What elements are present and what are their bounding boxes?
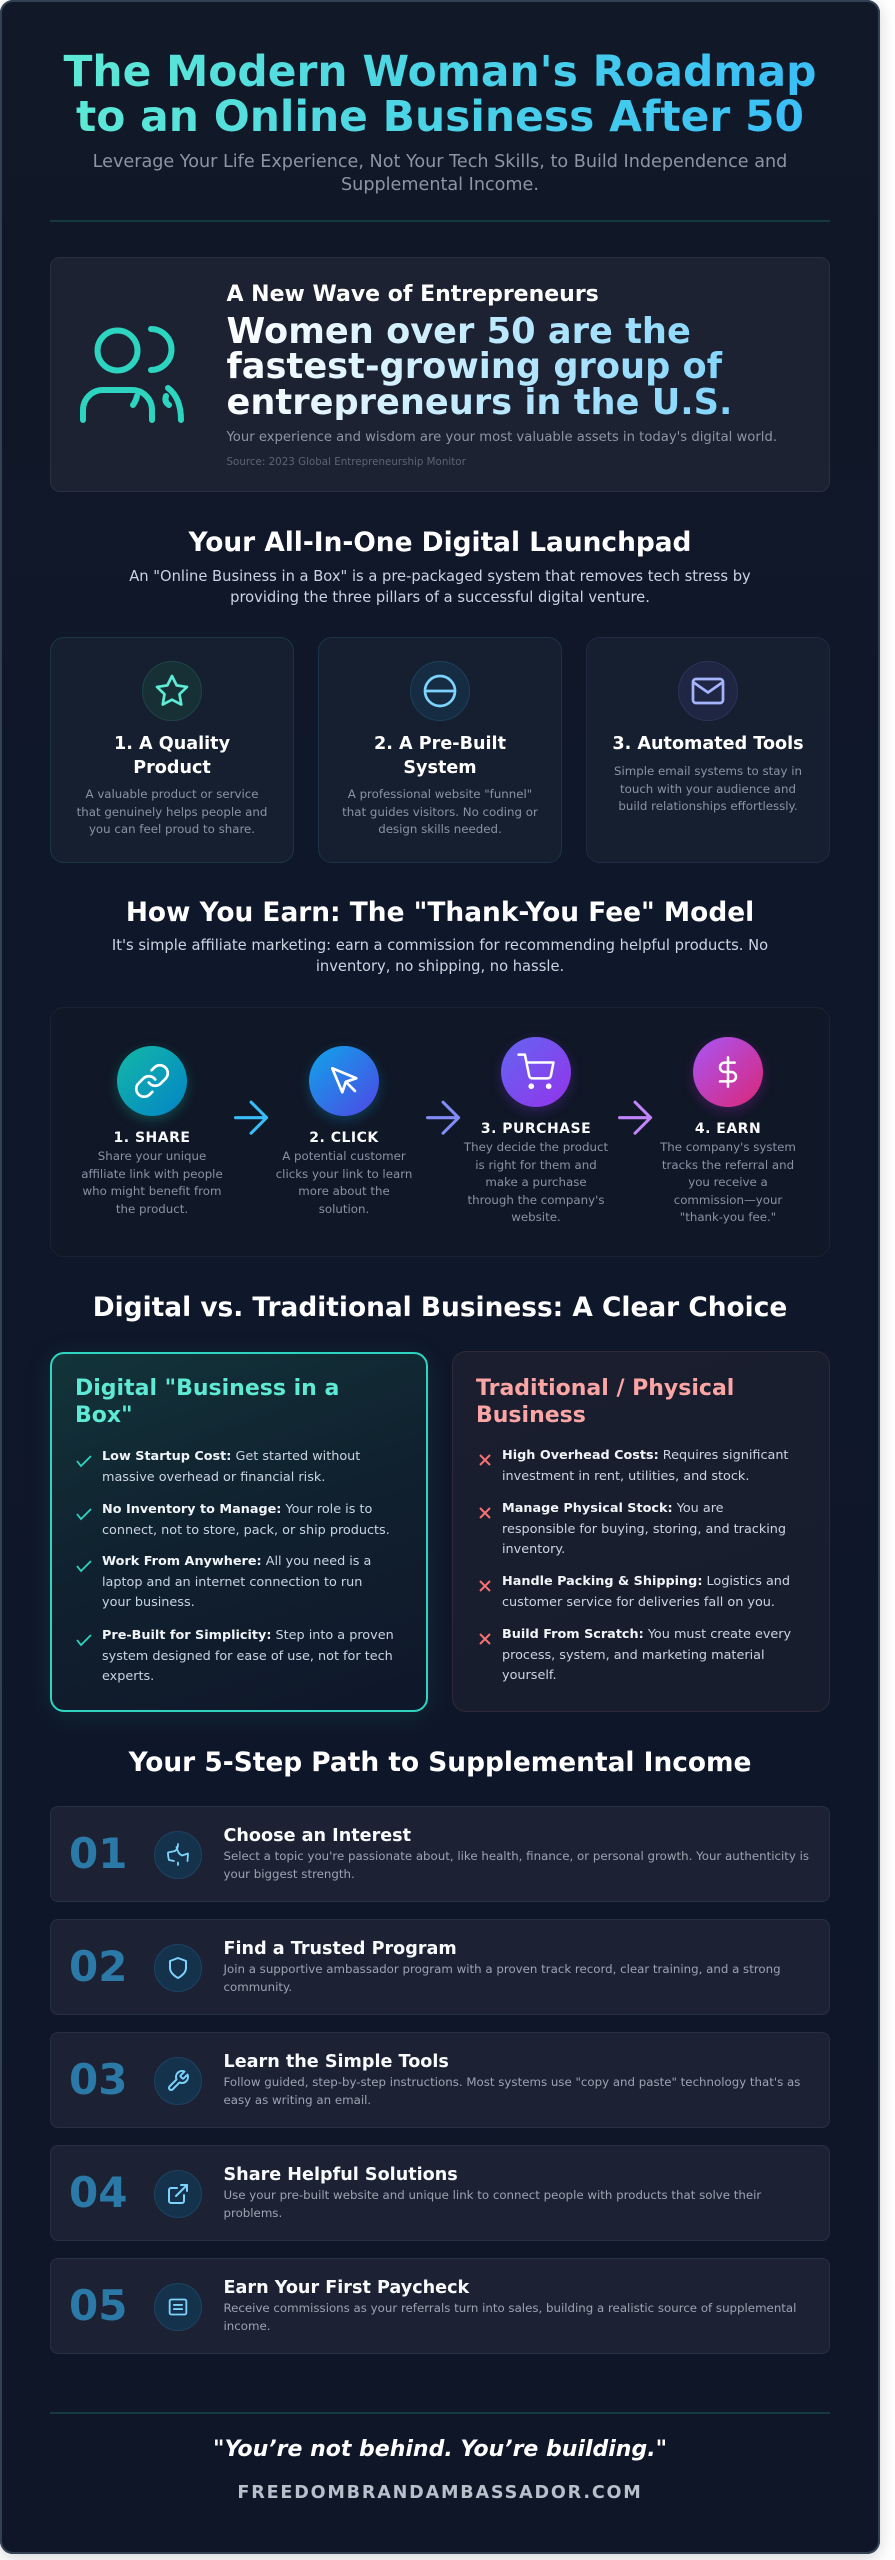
pillar text: that genuinely helps people and (77, 805, 267, 819)
heading: how you earn: How You Earn: The "Thank-You Fee" Model (126, 897, 754, 928)
pillar text: A valuable product or service (86, 787, 258, 801)
item (502, 1448, 788, 1484)
text: affiliate link with people (81, 1167, 223, 1181)
pillar text: you can feel proud to share. (89, 822, 255, 836)
pillar title: Product (133, 758, 211, 778)
website: FREEDOMBRANDAMBASSADOR.COM (237, 2483, 643, 2503)
panel: quality product (50, 637, 294, 863)
step text: problems. (224, 2206, 282, 2220)
traditional list (479, 1448, 791, 1683)
earn description (112, 937, 768, 975)
step text: Receive commissions as your referrals turn into sales, building a realistic source of supplemental (224, 2301, 796, 2315)
step text (224, 1961, 781, 1996)
step text: community. (224, 1980, 292, 1994)
step 02 (50, 1919, 830, 2015)
text: who might benefit from (83, 1184, 221, 1198)
item (502, 1501, 786, 1557)
step title: Share Helpful Solutions (224, 2165, 458, 2185)
number: 02 (69, 1942, 127, 1991)
cross (479, 1633, 491, 1645)
heading: launchpad: Your All-In-One Digital Launchpad (189, 527, 691, 558)
item: Handle Packing & Shipping: Logistics and (502, 1574, 790, 1589)
icon: interest (154, 1831, 202, 1879)
icon: paycheck (154, 2283, 202, 2331)
text: Share your unique (98, 1149, 206, 1163)
step 04 (50, 2145, 830, 2241)
step text: Follow guided, step-by-step instructions. Most systems use "copy and paste" technology that's as (224, 2075, 800, 2089)
item (502, 1627, 791, 1683)
icon: dollar (693, 1037, 763, 1107)
pillar text: touch with your audience and (620, 782, 796, 796)
stat note: Your experience and wisdom are your most valuable assets in today's digital world. (226, 430, 777, 445)
arrow (618, 1100, 652, 1135)
step text: Select a topic you're passionate about, like health, finance, or personal growth. Your authenticity is (224, 1849, 809, 1863)
panel: new wave of entrepreneurs (50, 257, 830, 492)
text: tracks the referral and (662, 1158, 794, 1172)
item: Work From Anywhere: All you need is a (102, 1554, 371, 1569)
item: your business. (102, 1595, 195, 1610)
text: "thank-you fee." (680, 1210, 776, 1224)
text: more about the (298, 1184, 390, 1198)
step title: Earn Your First Paycheck (224, 2278, 469, 2298)
icon: globe (410, 661, 470, 721)
pillar text: Simple email systems to stay in (614, 764, 802, 778)
pillar title: System (403, 758, 477, 778)
step text (224, 2187, 761, 2222)
step 05 (50, 2258, 830, 2354)
item (102, 1628, 394, 1684)
stat statement: Women over 50 are the (226, 311, 691, 352)
digital heading: Box" (75, 1403, 133, 1428)
icon: link (117, 1046, 187, 1116)
text: website. (511, 1210, 561, 1224)
text: solution. (319, 1202, 369, 1216)
pillar text (342, 787, 538, 836)
text (660, 1140, 796, 1224)
step 03 (50, 2032, 830, 2128)
text: The company's system (660, 1140, 796, 1154)
text: the product. (116, 1202, 188, 1216)
panel: pre-built system (318, 637, 562, 863)
text: A potential customer (282, 1149, 406, 1163)
item: laptop and an internet connection to run (102, 1575, 362, 1590)
cross (479, 1580, 491, 1592)
heading: comparison: Digital vs. Traditional Business: A Clear Choice (93, 1292, 787, 1323)
subtitle: Leverage Your Life Experience, Not Your Tech Skills, to Build Independence and (93, 152, 787, 172)
label: 2. CLICK (309, 1130, 379, 1146)
heading: five steps: Your 5-Step Path to Supplemental Income (129, 1747, 751, 1778)
icon: cursor (309, 1046, 379, 1116)
digital heading (75, 1376, 339, 1428)
step: click (276, 1044, 412, 1216)
item (502, 1574, 790, 1610)
panel: digital business (50, 1352, 428, 1712)
step 01 (50, 1806, 830, 1902)
step text (224, 2300, 796, 2335)
item: connect, not to store, pack, or ship products. (102, 1523, 390, 1538)
pillar text: A professional website "funnel" (348, 787, 532, 801)
item (102, 1502, 390, 1538)
text (276, 1149, 412, 1216)
step: purchase (464, 1036, 608, 1224)
pillar title: 3. Automated Tools (612, 734, 804, 754)
pillar text (614, 764, 802, 813)
item: system designed for ease of use, not for tech (102, 1649, 393, 1664)
icon: users (80, 326, 184, 423)
item: High Overhead Costs: Requires significant (502, 1448, 788, 1463)
stat statement: fastest-growing group of (226, 346, 722, 387)
item: Pre-Built for Simplicity: Step into a proven (102, 1628, 394, 1643)
step text: income. (224, 2319, 270, 2333)
step text (224, 2074, 800, 2109)
stat statement (226, 314, 746, 420)
check (76, 1634, 92, 1646)
step title: Find a Trusted Program (224, 1939, 457, 1959)
number: 03 (69, 2055, 127, 2104)
text: you receive a (688, 1175, 768, 1189)
cross (479, 1507, 491, 1519)
step text: easy as writing an email. (224, 2093, 371, 2107)
item: investment in rent, utilities, and stock. (502, 1469, 749, 1484)
subtitle (93, 152, 787, 195)
closing quote: "You’re not behind. You’re building." (213, 2437, 667, 2462)
panel: traditional business (452, 1351, 830, 1712)
pillar text: design skills needed. (378, 822, 502, 836)
item: Low Startup Cost: Get started without (102, 1449, 360, 1464)
item: No Inventory to Manage: Your role is to (102, 1502, 372, 1517)
check (76, 1455, 92, 1468)
step text: Use your pre-built website and unique link to connect people with products that solve their (224, 2188, 761, 2202)
pillar text (76, 787, 267, 836)
text: They decide the product (464, 1140, 608, 1154)
step: share (81, 1046, 223, 1216)
title: The Modern Woman's Roadmap (64, 47, 816, 96)
text: clicks your link to learn (276, 1167, 412, 1181)
subtitle: Supplemental Income. (341, 175, 539, 195)
traditional heading: Business (476, 1403, 586, 1428)
text: is right for them and (475, 1158, 597, 1172)
pillar title: 2. A Pre-Built (374, 734, 506, 754)
check (76, 1508, 92, 1520)
step title: Choose an Interest (224, 1826, 411, 1846)
icon: wrench (154, 2057, 202, 2105)
source: Source: 2023 Global Entrepreneurship Monitor (226, 456, 466, 468)
earn description: inventory, no shipping, no hassle. (316, 958, 564, 975)
icon: cart (501, 1037, 571, 1107)
title: to an Online Business After 50 (76, 92, 804, 140)
icon: star (142, 661, 202, 721)
launchpad description (129, 568, 751, 606)
item: responsible for buying, storing, and tracking (502, 1522, 786, 1537)
arrow (426, 1100, 460, 1135)
item: yourself. (502, 1668, 557, 1683)
step text: Join a supportive ambassador program with a proven track record, clear training, and a strong (224, 1962, 781, 1976)
launchpad description: providing the three pillars of a successful digital venture. (230, 589, 650, 606)
pillar text: that guides visitors. No coding or (342, 805, 538, 819)
digital heading: Digital "Business in a (75, 1376, 339, 1401)
arrow (234, 1100, 268, 1135)
text (464, 1140, 608, 1224)
item: inventory. (502, 1542, 565, 1557)
step text: your biggest strength. (224, 1867, 355, 1881)
traditional heading: Traditional / Physical (476, 1376, 734, 1401)
item (102, 1449, 360, 1485)
digital list (76, 1449, 394, 1684)
label: 1. SHARE (114, 1130, 190, 1146)
item: massive overhead or financial risk. (102, 1470, 325, 1485)
icon: share link (154, 2170, 202, 2218)
step text (224, 1848, 809, 1883)
icon: mail (678, 661, 738, 721)
item: Manage Physical Stock: You are (502, 1501, 724, 1516)
stat heading: A New Wave of Entrepreneurs (226, 282, 599, 307)
number: 01 (69, 1829, 127, 1878)
launchpad description: An "Online Business in a Box" is a pre-packaged system that removes tech stress by (129, 568, 751, 585)
title (50, 50, 830, 139)
pillar text: build relationships effortlessly. (618, 799, 798, 813)
item: experts. (102, 1669, 154, 1684)
item: customer service for deliveries fall on you. (502, 1595, 775, 1610)
cross (479, 1454, 491, 1466)
text: commission—your (674, 1193, 782, 1207)
item: Build From Scratch: You must create every (502, 1627, 791, 1642)
pillar title (114, 734, 230, 778)
item: process, system, and marketing material (502, 1648, 765, 1663)
panel: automated tools (586, 637, 830, 863)
check (76, 1560, 92, 1572)
text: make a purchase (485, 1175, 587, 1189)
step title: Learn the Simple Tools (224, 2052, 449, 2072)
label: 3. PURCHASE (481, 1121, 591, 1137)
pillar title: 1. A Quality (114, 734, 230, 754)
item (102, 1554, 371, 1610)
icon: shield (154, 1944, 202, 1992)
text: through the company's (468, 1193, 604, 1207)
label: 4. EARN (695, 1121, 761, 1137)
earn description: It's simple affiliate marketing: earn a commission for recommending helpful products. No (112, 937, 768, 954)
pillar title (374, 734, 506, 778)
panel: earning flow (50, 1007, 830, 1257)
stat statement: entrepreneurs in the U.S. (226, 382, 732, 423)
number: 05 (69, 2281, 127, 2330)
traditional heading (476, 1376, 734, 1428)
text (81, 1149, 223, 1216)
step: earn (660, 1036, 796, 1224)
number: 04 (69, 2168, 127, 2217)
